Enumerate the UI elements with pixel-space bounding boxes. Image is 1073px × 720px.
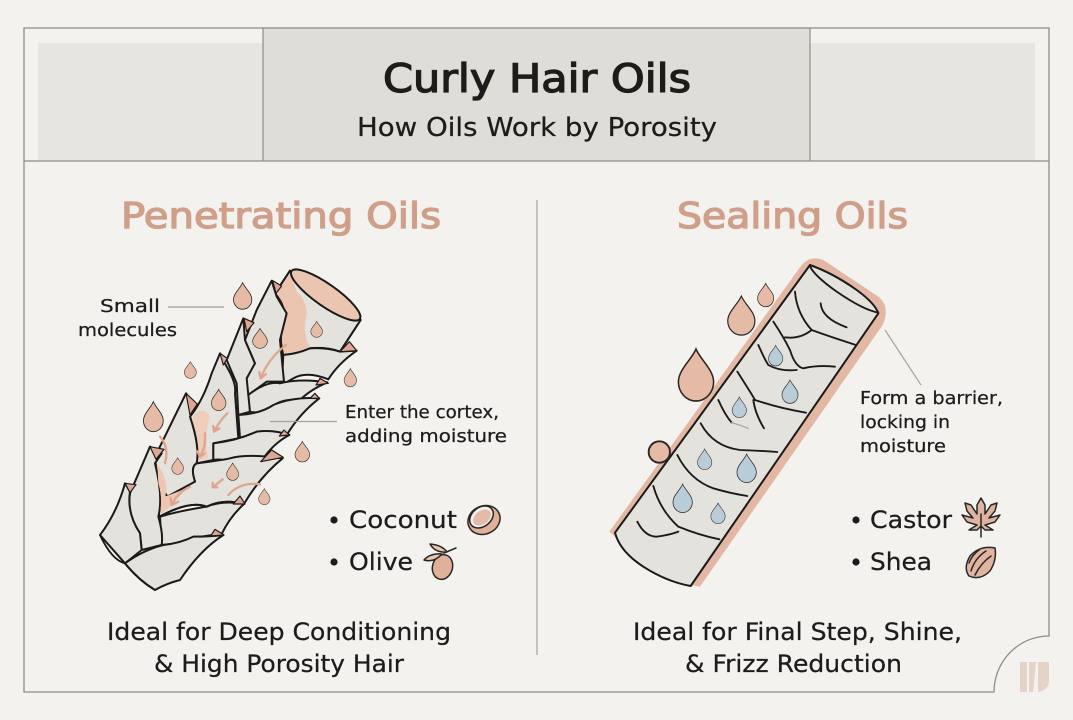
list: olive: Olive [349,548,413,576]
icon: olive [424,544,456,582]
caption: sealing oils use: Ideal for Final Step, Shine, [633,618,962,646]
list: coconut: Coconut [349,506,457,534]
header band [24,28,1049,161]
caption: sealing oils use: & Frizz Reduction [685,650,902,678]
callout: enter the cortex [270,402,507,447]
title: Curly Hair Oils [383,57,691,102]
list: shea: Shea [870,548,932,576]
list: castor [852,498,1000,537]
callout: form a barrier: Form a barrier, [860,388,1003,409]
caption: penetrating oils use: Ideal for Deep Conditioning [107,618,451,646]
scale tips [125,281,357,536]
callout: enter the cortex: adding moisture [345,426,507,447]
oil droplets and bead [649,283,774,463]
illustration: sealed hair strand [609,258,886,587]
caption: penetrating oils use: & High Porosity Hair [154,650,404,678]
callout: enter the cortex: Enter the cortex, [345,402,499,423]
logo mark [1020,662,1049,692]
callout: small molecules: molecules [78,320,177,341]
icon: shea nut [966,547,995,578]
callout: form a barrier: moisture [860,436,946,457]
icon: coconut [463,500,505,540]
callout: small molecules: Small [100,296,160,317]
heading: sealing oils: Sealing Oils [677,196,908,237]
oil coating [609,258,886,587]
inward arrows [259,345,286,378]
oil droplets [143,283,357,505]
list: shea [852,547,995,578]
panel: sealing oils [609,196,1003,678]
list: coconut [330,500,505,540]
subtitle: How Oils Work by Porosity [357,113,717,143]
water droplets [673,345,798,524]
callout: form a barrier: locking in [860,412,950,433]
center divider [536,200,538,655]
list: olive [330,544,456,582]
list: castor: Castor [870,506,952,534]
panel: penetrating oils [78,196,507,678]
heading: penetrating oils: Penetrating Oils [121,196,441,237]
callout: small molecules [78,296,224,341]
illustration: hair strand with raised cuticle scales [100,262,366,590]
caption: penetrating oils use [107,618,451,678]
callout: form a barrier [860,330,1003,457]
caption: sealing oils use [633,618,962,678]
icon: castor leaf [962,498,1000,537]
